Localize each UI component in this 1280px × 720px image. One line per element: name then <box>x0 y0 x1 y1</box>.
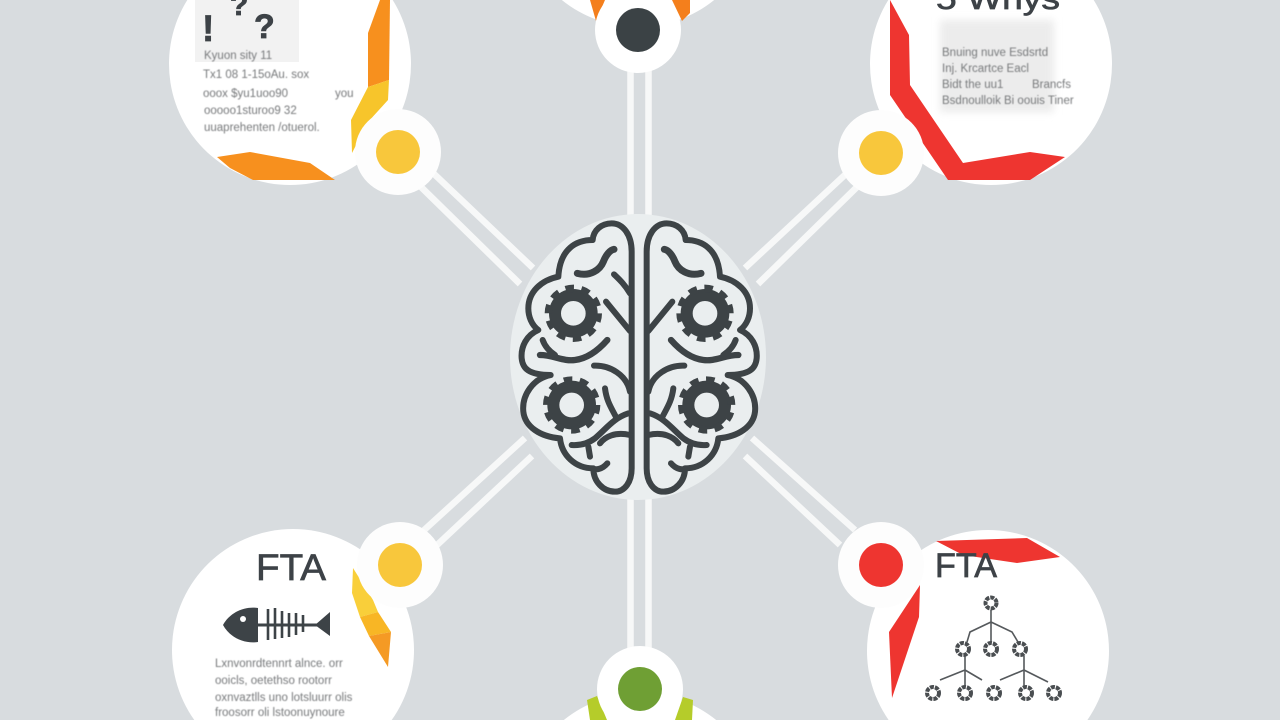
icon: exclamation and question marks: ! <box>202 8 214 49</box>
text block: uuaprehenten /otuerol. <box>204 122 320 134</box>
node: top left yellow <box>355 109 441 195</box>
left hemisphere <box>522 223 632 492</box>
text block: ooicls, oetethso rootorr <box>215 675 332 687</box>
accent: orange and yellow bands <box>217 0 390 180</box>
heading: FTA <box>935 547 997 585</box>
text backdrop <box>940 20 1054 112</box>
text block <box>942 47 1074 107</box>
node: bottom centre green <box>597 646 683 720</box>
connectors <box>420 60 858 660</box>
text block: Brancfs <box>1032 79 1071 91</box>
text block: ooooo1sturoo9 32 <box>204 105 297 117</box>
node: bottom left yellow <box>357 522 443 608</box>
panel: bottom centre <box>564 693 716 720</box>
text block: Kyuon sity 11 <box>204 50 272 62</box>
text block: froosorr oli lstoonuynoure <box>215 707 345 719</box>
text block <box>203 50 354 134</box>
text block: Lxnvonrdtennrt alnce. orr <box>215 658 343 670</box>
icon: fish skeleton <box>223 608 330 642</box>
accent: red band <box>890 0 1065 180</box>
text block: ooox $yu1uoo90 <box>203 88 288 100</box>
panel: top left causes <box>169 0 411 185</box>
text block <box>215 658 353 719</box>
text block: Bidt the uu1 <box>942 79 1003 91</box>
node: top centre dark <box>595 0 681 73</box>
panel: top centre <box>562 0 714 27</box>
icon: exclamation and question marks <box>202 0 275 49</box>
panel: top right 5 Whys <box>870 0 1112 185</box>
text block: Tx1 08 1-15oAu. sox <box>203 69 309 81</box>
icon: exclamation and question marks: ? <box>254 8 275 46</box>
right hemisphere <box>647 223 757 492</box>
central brain icon <box>510 214 766 500</box>
panel: bottom right fault tree <box>867 530 1109 720</box>
text block: Bnuing nuve Esdsrtd <box>942 47 1048 59</box>
accent: red bands <box>889 538 1060 698</box>
heading: FTA <box>256 547 326 588</box>
text backdrop <box>195 0 299 62</box>
text block: you <box>335 88 354 100</box>
text block: Bsdnoulloik Bi oouis Tiner <box>942 95 1074 107</box>
node: bottom right red <box>838 522 924 608</box>
text block: oxnvaztlls uno lotsluurr olis <box>215 692 353 704</box>
accent: yellow to orange band <box>352 568 391 667</box>
text block: Inj. Krcartce Eacl <box>942 63 1029 75</box>
node: top right yellow <box>838 110 924 196</box>
chart: fault tree <box>927 598 1060 699</box>
panel: bottom left fishbone <box>172 529 414 720</box>
